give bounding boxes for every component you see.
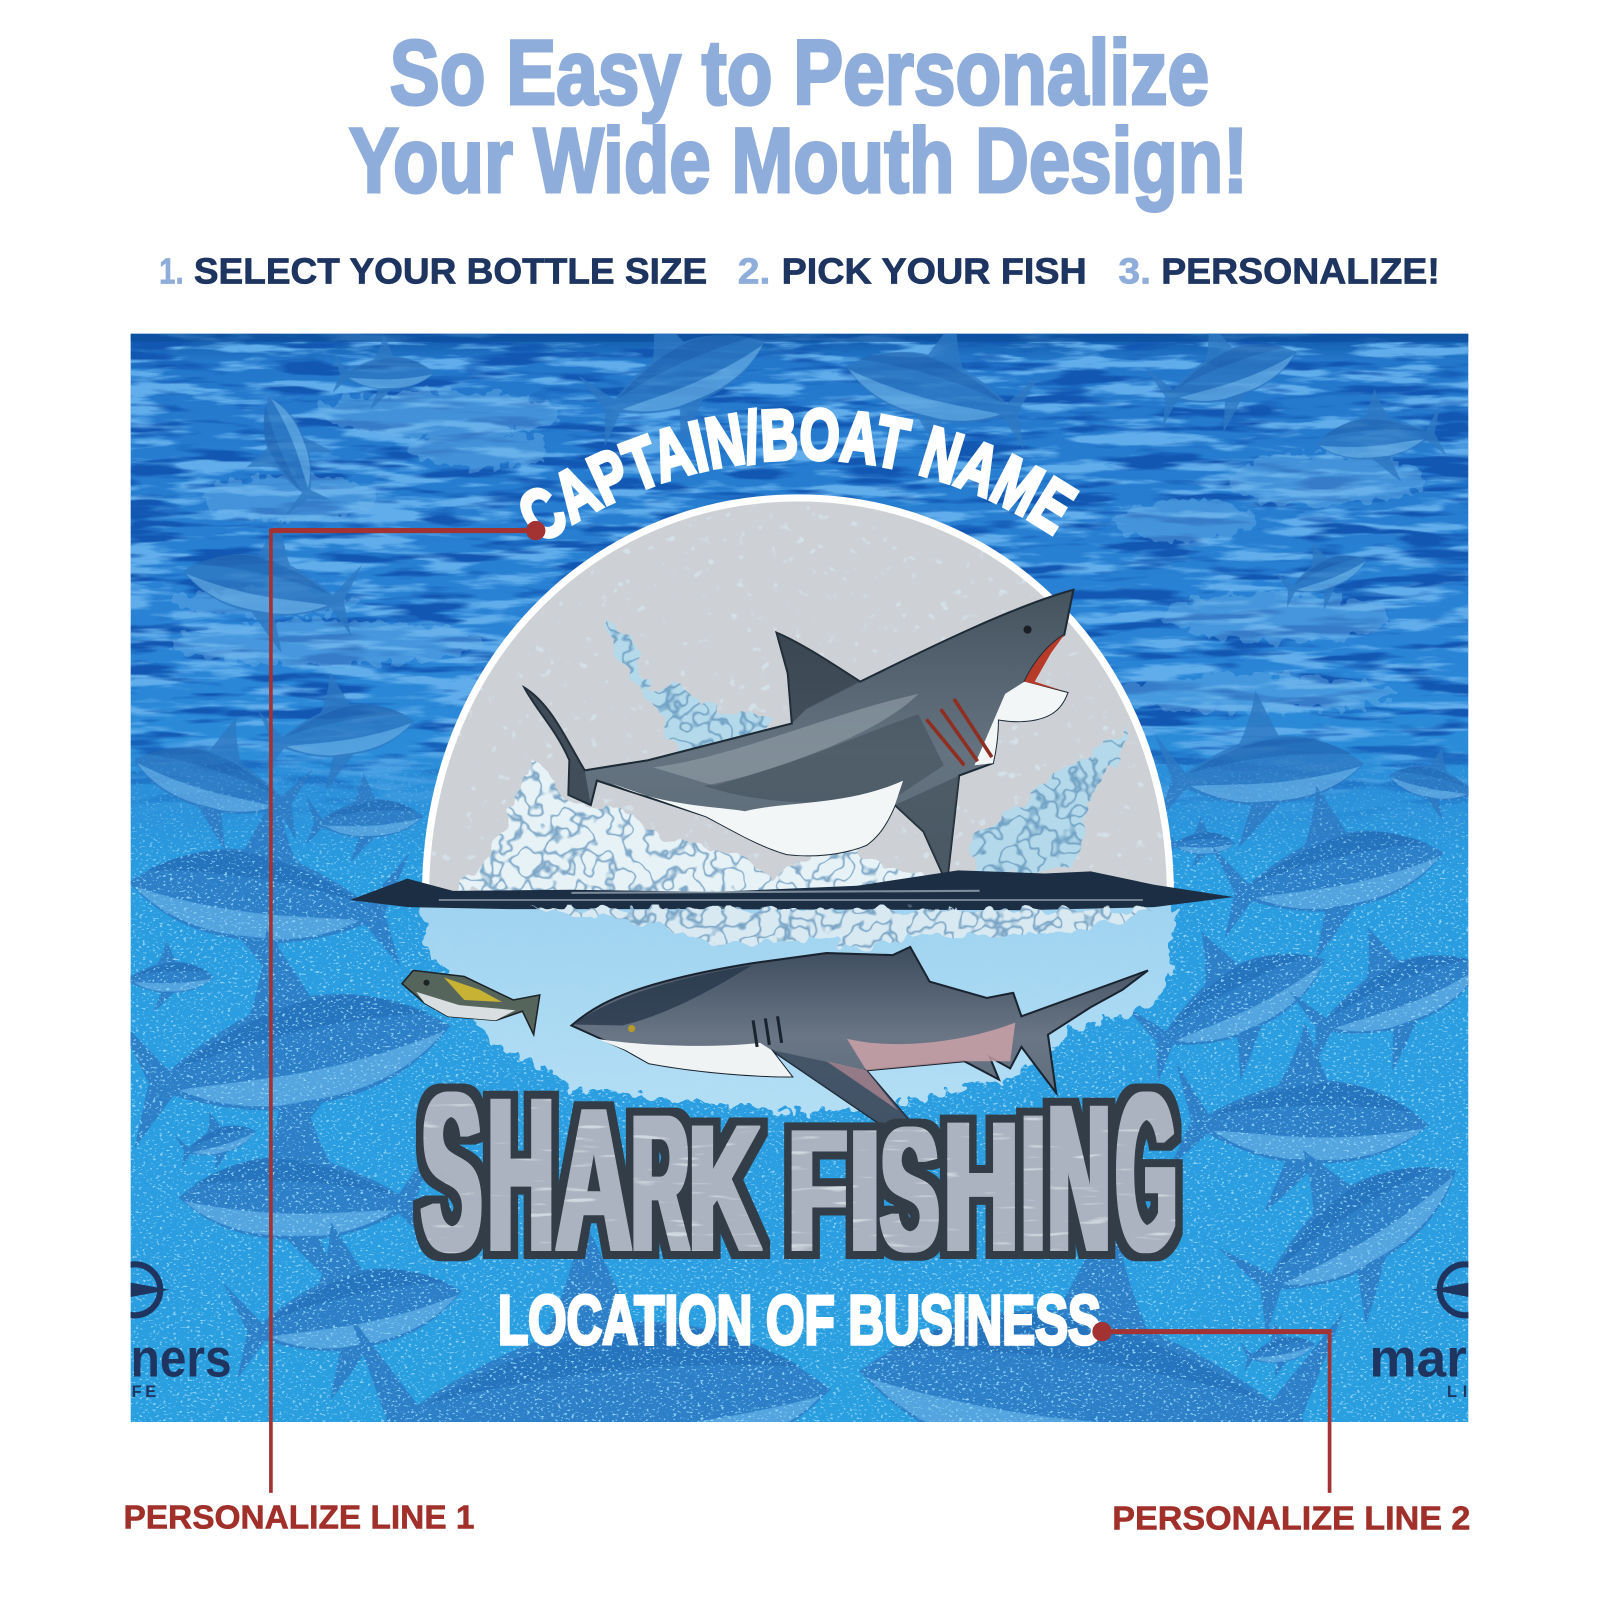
panel: shark fishing bottle wrap: G — [1116, 1046, 1177, 1298]
steps row — [159, 251, 1440, 292]
heading: shark fishing: K — [689, 1088, 760, 1289]
dome outline — [426, 498, 1170, 896]
leader line 2 — [1092, 1322, 1332, 1493]
brand logo right: mari — [1369, 1329, 1482, 1389]
gill slits — [927, 699, 992, 765]
panel: shark fishing bottle wrap — [130, 334, 1468, 1422]
water surface line — [350, 870, 1234, 910]
foam patches — [173, 391, 1423, 712]
tuna fish — [402, 970, 540, 1035]
dome splatter — [429, 501, 1167, 896]
headline line 1: So Easy to Personalize — [390, 22, 1209, 124]
location of business text: LOCATION OF BUSINESS — [498, 1281, 1101, 1359]
heading: shark fishing: I — [849, 1094, 881, 1287]
label: personalize line 1: PERSONALIZE LINE 1 — [123, 1500, 474, 1537]
heading: shark fishing: F — [789, 1094, 847, 1287]
heading: shark fishing: A — [556, 1067, 632, 1294]
heading: shark fishing: H — [944, 1084, 1018, 1289]
heading: shark fishing: H — [488, 1053, 554, 1297]
infographic canvas — [125, 36, 1470, 1530]
heading: shark fishing: S — [881, 1092, 939, 1288]
heading: shark fishing: R — [632, 1075, 689, 1292]
leader line 1 — [271, 521, 545, 1493]
brand logo left: ners — [131, 1329, 232, 1389]
underwater glow — [420, 898, 1176, 1113]
heading: shark fishing — [413, 1084, 1183, 1262]
blue spray — [604, 618, 1131, 881]
brand logo right: LI — [1447, 1383, 1467, 1401]
submerged splash reflection — [531, 908, 1154, 949]
steps row: 2. — [738, 251, 770, 292]
heading: shark fishing: S — [421, 1046, 482, 1298]
steps row: SELECT YOUR BOTTLE SIZE — [194, 251, 707, 292]
steps row: 1. — [159, 251, 184, 292]
label: personalize line 2: PERSONALIZE LINE 2 — [1112, 1501, 1470, 1538]
headline line 2: Your Wide Mouth Design! — [349, 110, 1248, 212]
steps row: 3. — [1118, 251, 1151, 292]
heading: shark fishing: I — [1021, 1075, 1045, 1292]
breaching great white shark — [524, 590, 1073, 884]
white splash — [458, 760, 924, 892]
steps row: PERSONALIZE! — [1161, 251, 1440, 292]
brand logo right — [1372, 1261, 1468, 1397]
curved captain name text: CAPTAIN/BOAT NAME — [520, 407, 1080, 539]
background sharks — [130, 334, 1468, 1422]
brand logo left — [130, 1261, 230, 1397]
dome — [426, 498, 1170, 896]
swimming shark — [571, 947, 1148, 1127]
steps row: PICK YOUR FISH — [782, 251, 1087, 292]
heading: shark fishing: N — [1048, 1063, 1110, 1295]
brand logo left: FE — [132, 1383, 156, 1401]
